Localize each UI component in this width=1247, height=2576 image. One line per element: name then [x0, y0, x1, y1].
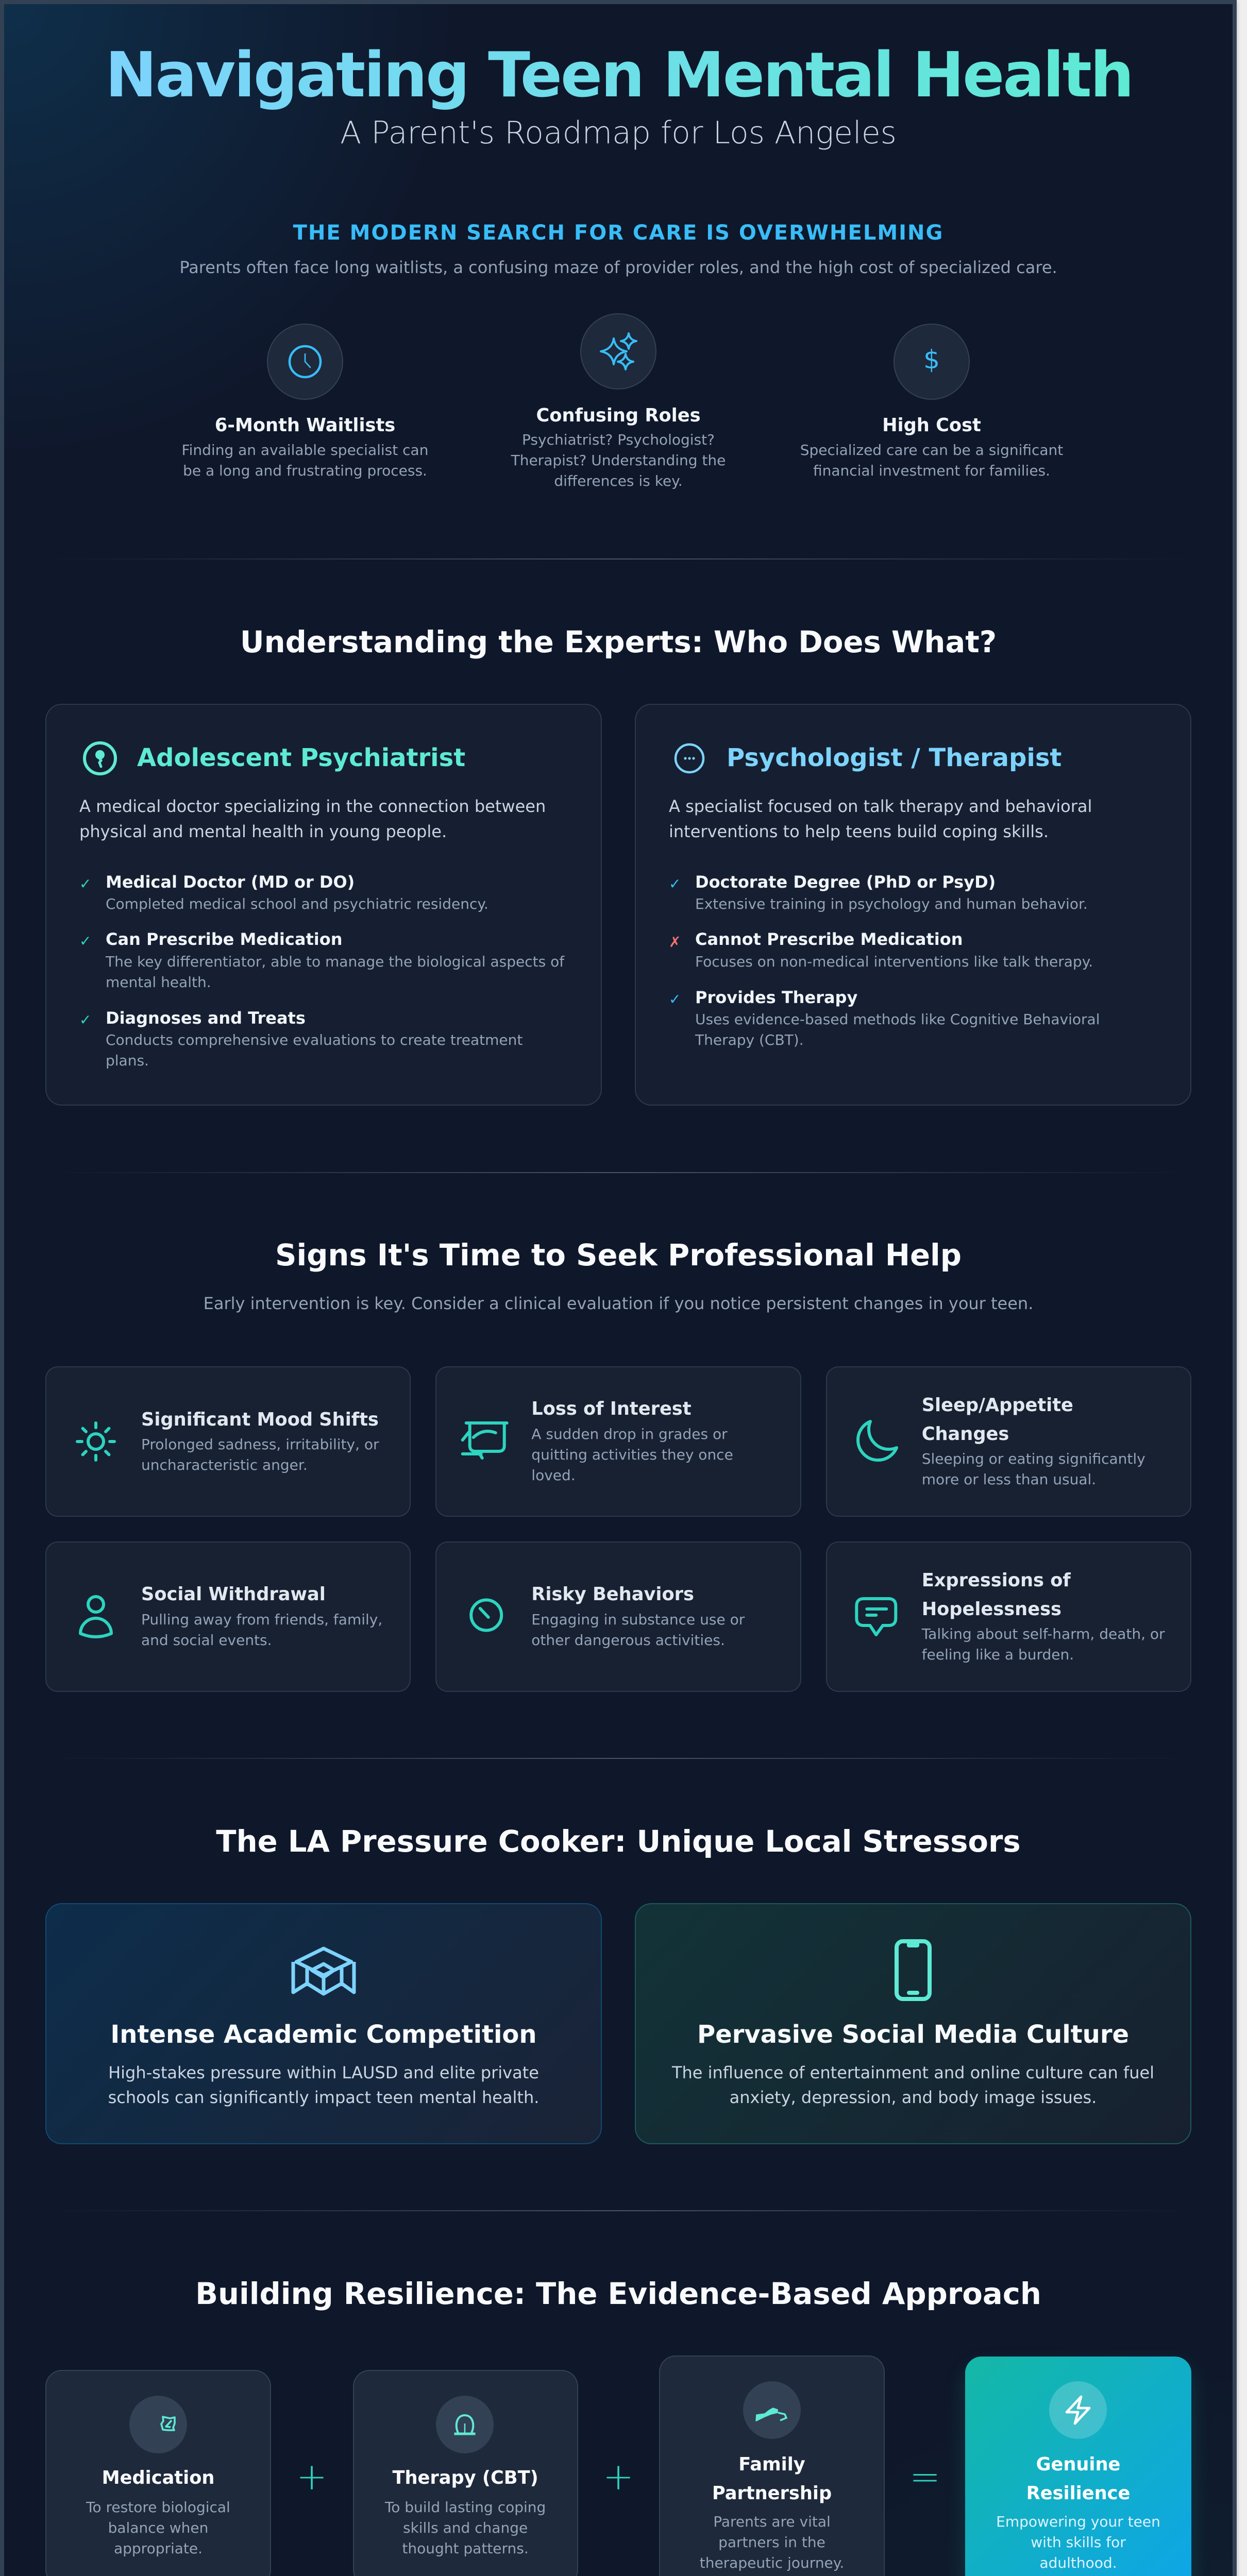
- cross: ✗: [669, 934, 681, 951]
- description: loved.: [531, 1467, 576, 1484]
- description: Sleeping or eating significantly: [922, 1450, 1145, 1467]
- item text: mental health.: [106, 974, 211, 991]
- icon: medication: [129, 2396, 187, 2453]
- description: financial investment for families.: [813, 462, 1050, 479]
- heading: search for care: THE MODERN SEARCH FOR CARE IS OVERWHELMING: [293, 221, 943, 245]
- description: feeling like a burden.: [922, 1646, 1074, 1663]
- heading: experts: Understanding the Experts: Who Does What?: [240, 625, 997, 659]
- description: [635, 2060, 1191, 2110]
- description: The influence of entertainment and online culture can fuel: [672, 2063, 1154, 2082]
- icon: dollar: [894, 324, 970, 400]
- item title: Doctorate Degree (PhD or PsyD): [695, 872, 996, 892]
- description: Therapist? Understanding the: [511, 452, 726, 469]
- description: [45, 2060, 602, 2110]
- heading: Psychologist / Therapist: [727, 743, 1061, 772]
- icon: speech bubble: [852, 1592, 901, 1641]
- label: Medication: [102, 2467, 214, 2488]
- panel: genuine resilience: [965, 2357, 1191, 2576]
- icon: chat: [674, 743, 705, 774]
- label: Changes: [922, 1423, 1009, 1445]
- description: [965, 2512, 1191, 2573]
- panel: psychologist / therapist: [635, 704, 1191, 1106]
- description: Pulling away from friends, family,: [141, 1611, 382, 1628]
- description: physical and mental health in young people.: [79, 822, 447, 841]
- check: ✓: [79, 875, 91, 892]
- description: [659, 2512, 885, 2573]
- description: Prolonged sadness, irritability, or: [141, 1436, 379, 1453]
- panel: sleep appetite: [826, 1366, 1191, 1517]
- item text: [695, 1011, 1100, 1048]
- label: High Cost: [882, 415, 981, 436]
- panel: high cost: [800, 324, 1063, 479]
- icon: bolt: [1049, 2381, 1107, 2439]
- description: other dangerous activities.: [531, 1632, 725, 1649]
- description: more or less than usual.: [922, 1471, 1096, 1488]
- icon: phone: [880, 1937, 946, 2003]
- item text: plans.: [106, 1052, 149, 1069]
- description: balance when: [108, 2519, 208, 2536]
- icon: head: [83, 741, 117, 775]
- description: Specialized care can be a significant: [800, 442, 1063, 459]
- intro text: Early intervention is key. Consider a clinical evaluation if you notice persistent changes in your teen.: [204, 1294, 1033, 1313]
- label: Sleep/Appetite: [922, 1395, 1073, 1416]
- item title: Provides Therapy: [695, 988, 857, 1007]
- description: differences is key.: [554, 472, 683, 489]
- description: partners in the: [718, 2534, 825, 2551]
- panel: medication: [45, 2370, 271, 2576]
- icon: therapy: [436, 2396, 494, 2453]
- description: [79, 796, 546, 841]
- icon: sparkles: [580, 313, 656, 389]
- description: [45, 2497, 271, 2559]
- item text: Completed medical school and psychiatric residency.: [106, 895, 488, 912]
- panel: adolescent psychiatrist: [45, 704, 602, 1106]
- heading: Pervasive Social Media Culture: [697, 2020, 1129, 2049]
- label: Significant Mood Shifts: [141, 1409, 379, 1430]
- description: adulthood.: [1039, 2554, 1117, 2571]
- description: be a long and frustrating process.: [183, 462, 427, 479]
- panel: hopelessness: [826, 1541, 1191, 1692]
- check: ✓: [669, 875, 681, 892]
- panel: social media: [635, 1903, 1191, 2144]
- panel: social withdrawal: [45, 1541, 411, 1692]
- description: A specialist focused on talk therapy and behavioral: [669, 796, 1092, 816]
- item text: The key differentiator, able to manage the biological aspects of: [106, 953, 564, 970]
- description: Empowering your teen: [996, 2513, 1160, 2530]
- item text: [105, 953, 565, 991]
- description: A sudden drop in grades or: [531, 1426, 728, 1443]
- panel: loss of interest: [435, 1366, 801, 1517]
- label: [922, 1566, 1071, 1624]
- description: [511, 431, 726, 489]
- icon: person: [79, 1595, 113, 1638]
- panel: waitlists: [182, 324, 428, 479]
- panel: family partnership: [659, 2355, 885, 2576]
- description: [669, 796, 1092, 841]
- label: Hopelessness: [922, 1599, 1061, 1620]
- description: schools can significantly impact teen mental health.: [108, 2088, 539, 2107]
- description: High-stakes pressure within LAUSD and elite private: [108, 2063, 539, 2082]
- description: [353, 2497, 578, 2559]
- label: Risky Behaviors: [531, 1584, 694, 1605]
- label: Expressions of: [922, 1570, 1071, 1591]
- description: [141, 1611, 382, 1649]
- label: [965, 2450, 1191, 2509]
- label: Resilience: [1026, 2483, 1130, 2504]
- icon: clock: [267, 324, 343, 400]
- description: To build lasting coping: [385, 2499, 546, 2516]
- description: interventions to help teens build coping skills.: [669, 822, 1049, 841]
- description: [800, 442, 1063, 479]
- heading: Adolescent Psychiatrist: [137, 743, 465, 772]
- panel: risky behaviors: [435, 1541, 801, 1692]
- item title: Can Prescribe Medication: [106, 929, 342, 949]
- check: ✓: [79, 1011, 91, 1028]
- item text: [106, 1031, 523, 1069]
- label: 6-Month Waitlists: [215, 415, 395, 436]
- intro text: Parents often face long waitlists, a confusing maze of provider roles, and the high cost of specialized care.: [179, 258, 1057, 277]
- description: appropriate.: [114, 2540, 203, 2557]
- label: [922, 1395, 1073, 1445]
- item title: Cannot Prescribe Medication: [695, 929, 963, 949]
- description: A medical doctor specializing in the connection between: [79, 796, 546, 816]
- check: ✓: [669, 991, 681, 1008]
- icon: chart board: [461, 1421, 509, 1460]
- panel: mood shifts: [45, 1366, 411, 1517]
- description: To restore biological: [86, 2499, 230, 2516]
- icon: sun: [76, 1421, 116, 1462]
- description: uncharacteristic anger.: [141, 1456, 308, 1473]
- icon: dollar: $: [923, 345, 940, 375]
- icon: moon: [856, 1420, 898, 1462]
- icon: gauge: [461, 1592, 511, 1641]
- item title: Medical Doctor (MD or DO): [106, 872, 355, 892]
- heading: resilience: Building Resilience: The Evidence-Based Approach: [195, 2277, 1041, 2311]
- label: Confusing Roles: [536, 405, 701, 426]
- description: [141, 1436, 379, 1473]
- subtitle: A Parent's Roadmap for Los Angeles: [340, 115, 897, 151]
- description: thought patterns.: [402, 2540, 529, 2557]
- description: skills and change: [403, 2519, 528, 2536]
- description: [922, 1624, 1165, 1665]
- item text: Focuses on non-medical interventions like talk therapy.: [695, 953, 1093, 970]
- description: Psychiatrist? Psychologist?: [522, 431, 715, 448]
- label: Social Withdrawal: [141, 1584, 326, 1605]
- label: Loss of Interest: [531, 1398, 692, 1419]
- operator: plus: +: [603, 2455, 634, 2498]
- item text: Therapy (CBT).: [695, 1031, 804, 1048]
- item text: Conducts comprehensive evaluations to create treatment: [106, 1031, 523, 1048]
- description: with skills for: [1031, 2534, 1126, 2551]
- description: [922, 1450, 1145, 1488]
- label: Family: [738, 2454, 805, 2475]
- description: quitting activities they once: [531, 1446, 733, 1463]
- label: Partnership: [712, 2483, 832, 2504]
- heading: signs: Signs It's Time to Seek Professional Help: [275, 1238, 962, 1273]
- icon: academic cap: [291, 1937, 357, 2003]
- description: Finding an available specialist can: [182, 442, 428, 459]
- operator: plus: +: [296, 2455, 327, 2498]
- item text: Uses evidence-based methods like Cognitive Behavioral: [695, 1011, 1100, 1028]
- operator: equals: =: [909, 2455, 940, 2498]
- description: anxiety, depression, and body image issues.: [730, 2088, 1097, 2107]
- icon: family: [743, 2381, 801, 2439]
- heading: pressure cooker: The LA Pressure Cooker: Unique Local Stressors: [216, 1824, 1021, 1859]
- description: Engaging in substance use or: [531, 1611, 745, 1628]
- description: [531, 1426, 733, 1484]
- description: Talking about self-harm, death, or: [922, 1625, 1165, 1642]
- description: and social events.: [141, 1632, 272, 1649]
- title: Navigating Teen Mental Health: [105, 39, 1133, 111]
- item text: Extensive training in psychology and human behavior.: [695, 895, 1088, 912]
- panel: therapy: [353, 2370, 578, 2576]
- check: ✓: [79, 933, 91, 950]
- description: [182, 442, 428, 479]
- item title: Diagnoses and Treats: [106, 1008, 306, 1028]
- label: Genuine: [1036, 2454, 1120, 2475]
- description: therapeutic journey.: [700, 2554, 844, 2571]
- label: Therapy (CBT): [392, 2467, 538, 2488]
- heading: Intense Academic Competition: [110, 2020, 537, 2049]
- description: [531, 1609, 745, 1651]
- panel: academic competition: [45, 1903, 602, 2144]
- label: [659, 2450, 885, 2509]
- description: Parents are vital: [713, 2513, 831, 2530]
- panel: confusing roles: [511, 313, 726, 489]
